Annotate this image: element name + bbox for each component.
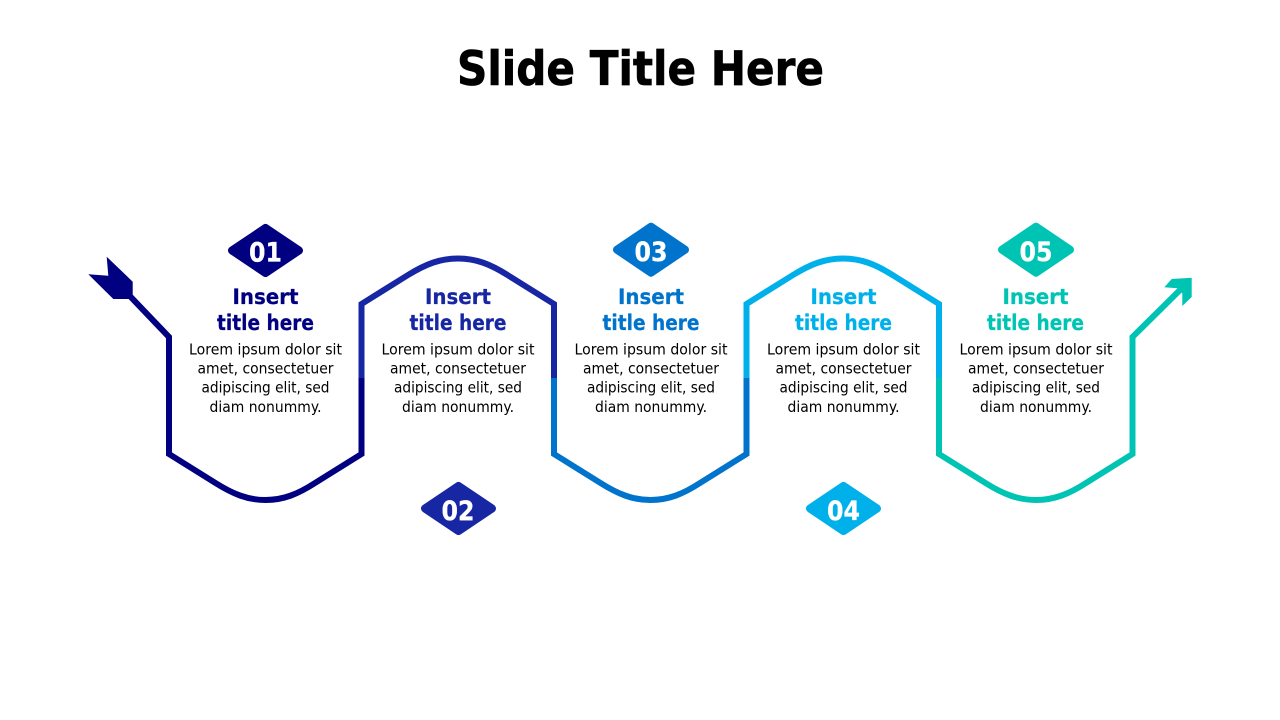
step 03 (574, 227, 728, 416)
heading 02: Insert (425, 285, 491, 310)
body 01: diam nonummy. (210, 398, 322, 416)
body 03: amet, consectetuer (583, 360, 720, 378)
body 05: amet, consectetuer (968, 360, 1105, 378)
icon: arrow head (1164, 278, 1192, 306)
step 05 (960, 227, 1112, 416)
badge 03 (617, 227, 685, 273)
badge 05 (1002, 227, 1070, 273)
body 01: adipiscing elit, sed (202, 378, 330, 396)
step 01 (189, 228, 342, 416)
icon: arrow fletching (88, 257, 133, 299)
body 03: Lorem ipsum dolor sit (574, 340, 728, 358)
heading 01: title here (217, 311, 314, 336)
body 01: Lorem ipsum dolor sit (189, 340, 342, 358)
badge 03: 03 (634, 237, 668, 268)
wave line segment 5 with arrow (939, 278, 1192, 500)
body 03: diam nonummy. (595, 398, 707, 416)
heading 03: title here (602, 311, 700, 336)
body 05: adipiscing elit, sed (972, 378, 1100, 396)
body 03: adipiscing elit, sed (587, 378, 715, 396)
heading 04: title here (795, 311, 892, 336)
badge 02: 02 (442, 496, 474, 527)
heading 04: Insert (810, 285, 876, 310)
body 04: diam nonummy. (788, 398, 900, 416)
wave line segment 3 (554, 378, 746, 500)
body 02: adipiscing elit, sed (394, 378, 522, 396)
badge 04: 04 (827, 496, 860, 527)
wave line segment 2 (362, 258, 554, 378)
heading 02: title here (410, 311, 506, 336)
body 04: Lorem ipsum dolor sit (767, 340, 920, 358)
step 04 (767, 285, 920, 531)
heading 05: title here (987, 311, 1084, 336)
badge 04 (810, 486, 877, 531)
heading 03: Insert (618, 285, 684, 310)
body 04: amet, consectetuer (776, 360, 912, 378)
body 02: diam nonummy. (402, 398, 514, 416)
body 01: amet, consectetuer (198, 360, 334, 378)
wave line segment 1 with tail (88, 257, 362, 500)
badge 01: 01 (249, 238, 282, 268)
body 04: adipiscing elit, sed (780, 378, 908, 396)
heading 01: Insert (232, 285, 298, 310)
step 02 (382, 285, 534, 531)
body 02: Lorem ipsum dolor sit (382, 340, 534, 358)
body 02: amet, consectetuer (390, 360, 527, 378)
badge 01 (232, 228, 299, 273)
badge 02 (425, 486, 492, 531)
wave line segment 4 (746, 258, 939, 378)
title: Slide Title Here (457, 42, 824, 97)
body 05: diam nonummy. (980, 398, 1092, 416)
heading 05: Insert (1002, 285, 1068, 310)
badge 05: 05 (1020, 237, 1052, 268)
body 05: Lorem ipsum dolor sit (960, 340, 1112, 358)
